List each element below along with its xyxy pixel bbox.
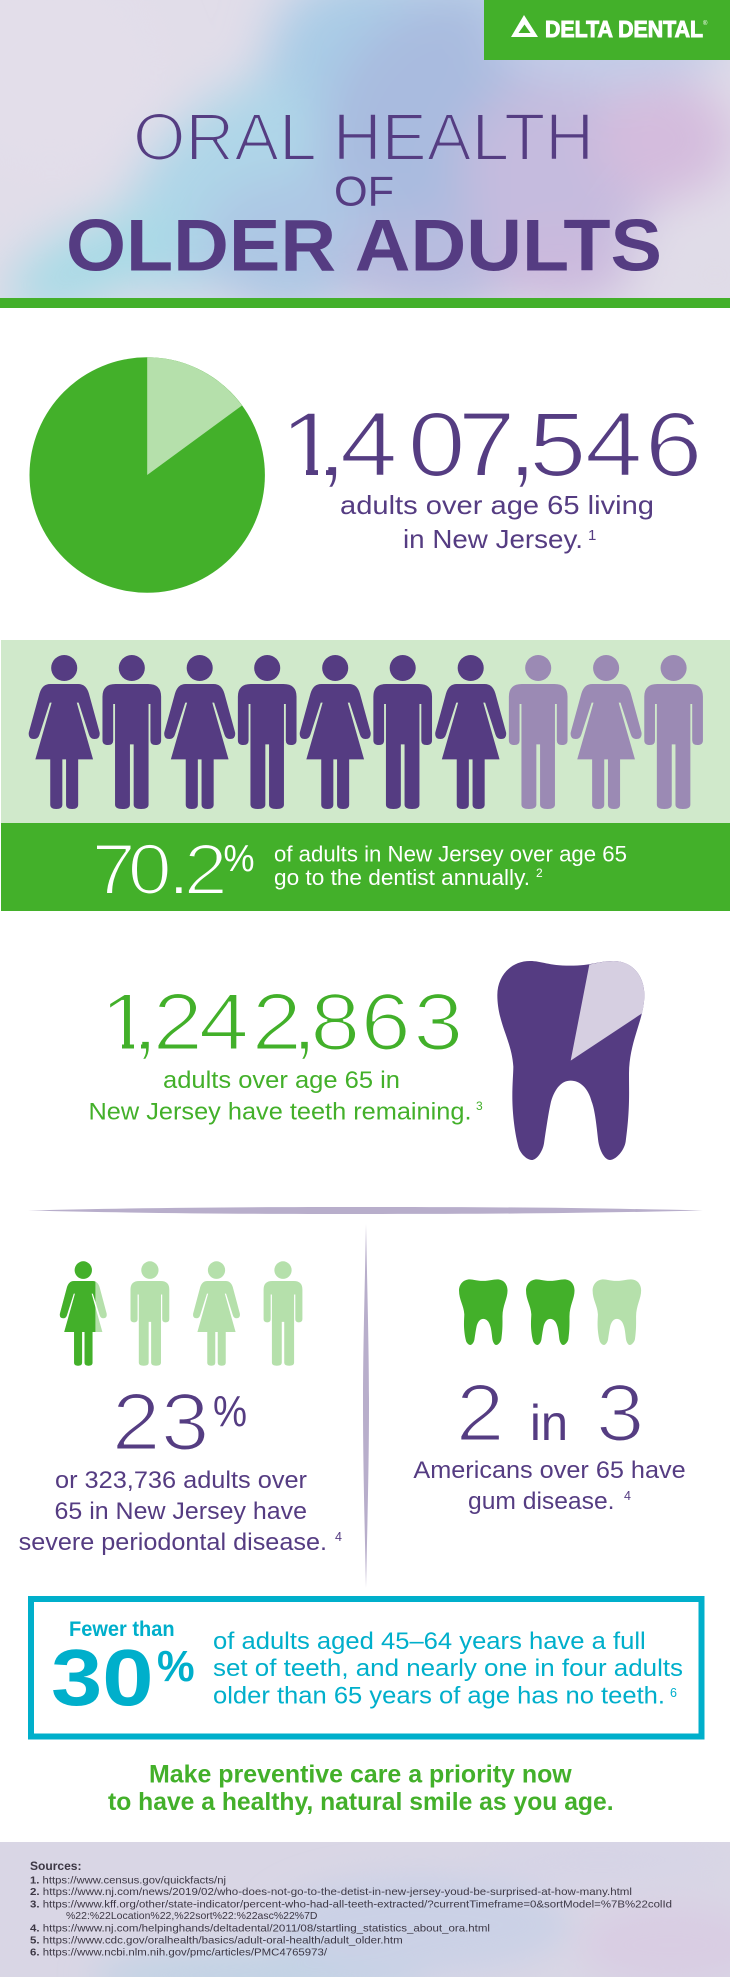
icon: three teeth, two highlighted <box>459 1279 641 1345</box>
footnote 1: 1 <box>588 527 596 544</box>
stat: 2 in 3 gum disease <box>413 1367 686 1515</box>
source 4: 4. https://www.nj.com/helpinghands/deltadental/2011/08/startling_statistics_about_ora.html <box>30 1923 490 1935</box>
call to action <box>108 1761 614 1816</box>
caption line 2: 65 in New Jersey have <box>54 1498 307 1525</box>
sources list <box>30 1861 672 1959</box>
green header rule <box>0 298 730 308</box>
big percent: 23 <box>112 1376 209 1467</box>
band text line 1: of adults in New Jersey over age 65 <box>274 842 627 867</box>
source 1: 1. https://www.census.gov/quickfacts/nj <box>30 1874 226 1886</box>
caption line 1: or 323,736 adults over <box>55 1467 307 1494</box>
sources heading: Sources: <box>30 1861 82 1873</box>
caption line 2: gum disease. <box>468 1488 614 1515</box>
percent sign: % <box>224 838 254 880</box>
icon: large tooth <box>497 961 644 1160</box>
footnote 4: 4 <box>624 1489 631 1503</box>
percent sign: % <box>157 1642 195 1691</box>
word in: in <box>530 1395 568 1451</box>
source 3: 3. https://www.kff.org/other/state-indicator/percent-who-had-all-teeth-extracted/?currentTimeframe=0&sortModel=%7B%22colId <box>30 1899 672 1911</box>
caption line 3: severe periodontal disease. <box>19 1529 327 1556</box>
stat: 23% periodontal disease <box>19 1376 342 1556</box>
logo: Delta Dental <box>484 0 730 60</box>
registered mark: ® <box>703 20 708 27</box>
source 6: 6. https://www.ncbi.nlm.nih.gov/pmc/articles/PMC4765973/ <box>30 1947 327 1959</box>
title <box>66 100 662 286</box>
source 5: 5. https://www.cdc.gov/oralhealth/basics/adult-oral-health/adult_older.htm <box>30 1934 403 1946</box>
footer panel with watercolor background <box>0 1840 730 1977</box>
footnote 3: 3 <box>476 1099 483 1113</box>
title line 2: OF <box>334 168 394 214</box>
big number: 1,242,863 <box>101 977 463 1068</box>
callout: fewer than 30% <box>31 1599 702 1736</box>
title line 3: OLDER ADULTS <box>66 206 662 286</box>
caption line 1: Americans over 65 have <box>413 1457 686 1484</box>
stat: 1,407,546 adults <box>291 413 697 554</box>
caption line 2: New Jersey have teeth remaining. <box>88 1098 471 1126</box>
percent sign: % <box>213 1387 247 1436</box>
callout number: 30 <box>51 1633 154 1722</box>
panel: people pictogram <box>1 640 730 823</box>
footnote 2: 2 <box>536 866 543 880</box>
big number: 1,407,546 <box>280 393 702 496</box>
panel: 70.2% stat band <box>1 823 730 911</box>
callout text line 1: of adults aged 45–64 years have a full <box>213 1628 646 1655</box>
stat: 1,242,863 adults <box>90 994 482 1124</box>
big 2: 2 <box>456 1367 504 1458</box>
call to action line 1: Make preventive care a priority now <box>149 1761 572 1789</box>
logo wordmark: DELTA DENTAL <box>545 16 703 42</box>
big percent: 70.2 <box>92 829 227 909</box>
callout text line 2: set of teeth, and nearly one in four adults <box>213 1655 683 1682</box>
icon: delta triangle <box>511 15 538 37</box>
header panel with watercolor background <box>0 0 730 298</box>
big 3: 3 <box>596 1367 644 1458</box>
title line 1: ORAL HEALTH <box>133 100 594 175</box>
pictogram: four people, one quarter highlighted <box>60 1261 302 1366</box>
pie chart <box>30 357 265 593</box>
footnote 4: 4 <box>335 1530 342 1544</box>
callout text line 3: older than 65 years of age has no teeth. <box>213 1682 665 1709</box>
source 3 continued: %22:%22Location%22,%22sort%22:%22asc%22%7D <box>66 1910 318 1922</box>
caption line 1: adults over age 65 in <box>163 1067 400 1094</box>
footnote 6: 6 <box>670 1686 677 1700</box>
pictogram: ten people, seven dark <box>29 655 703 809</box>
band text line 2: go to the dentist annually. <box>274 865 530 890</box>
source 2: 2. https://www.nj.com/news/2019/02/who-does-not-go-to-the-detist-in-new-jersey-youd-be-surprised-at-how-many.html <box>30 1886 632 1898</box>
callout kicker: Fewer than <box>69 1618 175 1641</box>
caption line 1: adults over age 65 living <box>340 490 654 520</box>
caption line 2: in New Jersey. <box>403 524 583 554</box>
call to action line 2: to have a healthy, natural smile as you age. <box>108 1788 614 1816</box>
